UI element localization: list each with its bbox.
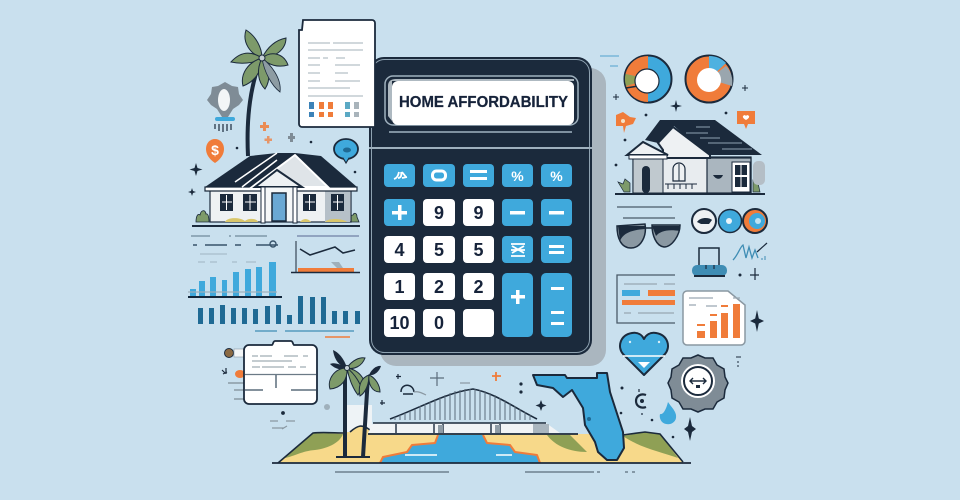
chart card — [683, 291, 745, 345]
calculator keys: 2 — [434, 277, 444, 297]
bar chart: light blue — [188, 262, 282, 298]
water channel — [380, 435, 540, 463]
icon: seal badge — [668, 355, 728, 412]
icon: shield lightbulb — [207, 82, 243, 132]
report panel — [617, 275, 675, 323]
house: left — [192, 153, 360, 226]
palm trees: bottom — [329, 350, 381, 457]
divider lines and small labels — [191, 236, 359, 262]
bridge — [368, 389, 578, 434]
calculator keys: 0 — [434, 313, 444, 333]
icon: heart shield — [620, 333, 668, 375]
calculator keys: 4 — [394, 240, 405, 260]
calculator keys: 2 — [473, 277, 484, 297]
calculator keys: 9 — [434, 203, 444, 223]
calculator keys: 1 — [394, 277, 405, 297]
sparkle accents: right — [620, 268, 764, 441]
clipboard card — [222, 341, 317, 404]
icon: dollar tag — [206, 139, 224, 163]
calculator display — [385, 76, 578, 125]
calculator keys — [384, 164, 572, 337]
calculator — [369, 57, 606, 366]
bottom baseline rules — [335, 471, 635, 473]
palm tree: top left — [231, 30, 288, 156]
donut charts — [624, 56, 732, 102]
right side accents — [600, 56, 748, 166]
three round icons — [692, 209, 767, 233]
icon: dollar tag: $ — [211, 142, 219, 158]
Florida map — [533, 373, 624, 460]
icon: speech bubble — [334, 139, 358, 163]
calculator keys: % — [550, 168, 563, 184]
icon: orange heart tag — [737, 111, 755, 129]
sparkline — [733, 243, 767, 260]
sparkle accents: left — [188, 122, 356, 196]
calculator keys: 5 — [434, 240, 444, 260]
house: right — [615, 120, 765, 194]
document with colour chips — [299, 20, 375, 127]
calculator display: HOME AFFORDABILITY — [399, 94, 569, 111]
calculator keys: % — [511, 168, 524, 184]
calculator keys: 5 — [473, 240, 484, 260]
ground and beach scene — [272, 405, 691, 463]
icon: coin — [636, 389, 646, 415]
icon: printer — [692, 248, 727, 276]
bar chart: dark blue — [198, 296, 360, 337]
sunglasses — [617, 207, 680, 248]
calculator keys: 10 — [389, 313, 410, 333]
icon: water flame — [660, 402, 676, 424]
line chart — [291, 241, 360, 272]
small scene icons — [270, 372, 546, 429]
calculator keys: 9 — [473, 203, 484, 223]
icon: orange house tag — [616, 112, 636, 133]
